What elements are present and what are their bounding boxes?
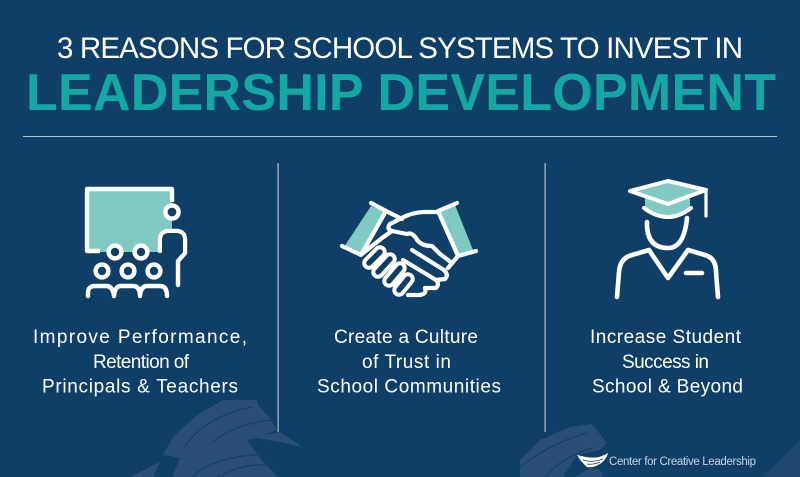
icon: graduate [617, 181, 718, 297]
finger capsules [369, 252, 408, 290]
title line 1: 3 REASONS FOR SCHOOL SYSTEMS TO INVEST IN [57, 32, 743, 65]
caption: improve performance: Improve Performance, [33, 327, 247, 348]
caption: culture of trust: School Communities [317, 376, 501, 398]
title line 2: LEADERSHIP DEVELOPMENT [26, 64, 776, 122]
column divider right [544, 163, 546, 432]
caption: student success: Success in [622, 352, 709, 373]
caption: improve performance: Retention of [93, 352, 190, 373]
horizontal divider [23, 136, 777, 137]
caption: student success [590, 327, 743, 398]
icon: logo feather [577, 453, 608, 467]
column divider left [278, 163, 279, 432]
caption: improve performance: Principals & Teachers [42, 376, 238, 398]
logo wordmark: Center for Creative Leadership [609, 456, 756, 468]
caption: student success: School & Beyond [592, 376, 743, 398]
icon: teacher with classroom [87, 189, 185, 296]
caption: student success: Increase Student [590, 327, 742, 348]
background wing motif: left [130, 400, 303, 477]
caption: culture of trust: Create a Culture [334, 327, 478, 348]
caption: culture of trust: of Trust in [362, 352, 451, 373]
logo: Center for Creative Leadership [577, 453, 756, 468]
caption: culture of trust [317, 327, 501, 398]
title [26, 32, 776, 122]
caption: improve performance [33, 327, 247, 398]
icon: handshake [342, 203, 476, 295]
background wing motif: right [520, 424, 800, 477]
